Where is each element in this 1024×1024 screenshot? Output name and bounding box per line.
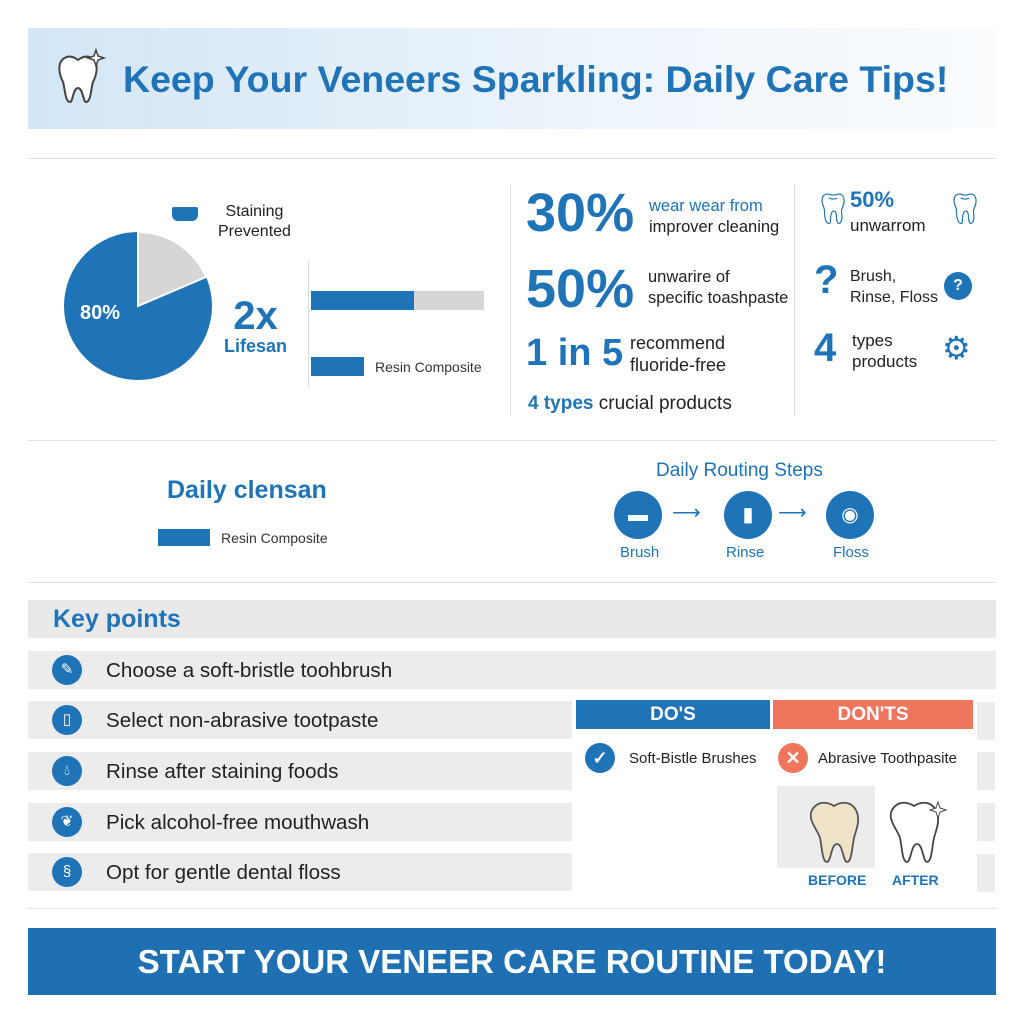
- key point list: ❦: [61, 813, 73, 830]
- staining prevented label: Prevented: [218, 223, 291, 240]
- daily cleansing legend: Daily clensan: [167, 476, 327, 504]
- dos and donts panel: Soft-Bistle Brushes: [629, 750, 757, 767]
- right stats with icons: Brush,: [850, 268, 896, 285]
- key point list: ▯: [63, 711, 71, 728]
- right stats with icons: ?: [814, 258, 838, 302]
- pie chart: [64, 232, 212, 380]
- dos and donts panel: AFTER: [892, 872, 939, 888]
- stat: 2x lifespan: 2x: [233, 294, 278, 338]
- key point list: 💧︎: [64, 762, 70, 779]
- right stats with icons: ⚙: [942, 330, 971, 366]
- dos and donts panel: [576, 700, 974, 892]
- key point list: [28, 651, 996, 891]
- call to action banner: START YOUR VENEER CARE ROUTINE TODAY!: [138, 943, 886, 980]
- stats column: 1 in 5: [526, 332, 623, 374]
- right stats with icons: [814, 187, 984, 371]
- dos and donts panel: ✕: [785, 748, 801, 768]
- daily routine steps: ▬: [628, 504, 648, 526]
- key point list: Opt for gentle dental floss: [106, 861, 341, 884]
- right stats with icons: unwarrom: [850, 216, 926, 235]
- key point list: Choose a soft-bristle toohbrush: [106, 659, 392, 682]
- dos and donts panel: Abrasive Toothpasite: [818, 750, 957, 767]
- right stats with icons: ?: [953, 277, 963, 294]
- stats column: 50%: [526, 259, 634, 319]
- daily cleansing legend: [158, 476, 328, 546]
- stats column: 30%: [526, 183, 634, 243]
- dos and donts panel: DON'TS: [837, 704, 909, 725]
- daily routine steps: [614, 460, 874, 561]
- key point list: Select non-abrasive tootpaste: [106, 709, 378, 732]
- stats column: recommend: [630, 333, 725, 353]
- stats column: improver cleaning: [649, 218, 779, 236]
- daily routine steps: ⟶: [778, 502, 807, 524]
- title: Keep Your Veneers Sparkling: Daily Care Tips!: [123, 58, 948, 100]
- staining prevented label: Staining: [226, 203, 283, 220]
- stats column: 4 types crucial products: [528, 393, 732, 414]
- key point list: ✎: [61, 661, 73, 678]
- call to action banner: [28, 928, 996, 995]
- key points heading: Key points: [53, 605, 181, 633]
- daily routine steps: Daily Routing Steps: [656, 460, 823, 481]
- right stats with icons: 🦷︎: [946, 193, 984, 226]
- right stats with icons: types: [852, 331, 893, 350]
- icon: tooth: [58, 48, 106, 103]
- key point list: Rinse after staining foods: [106, 760, 338, 783]
- stat: 2x lifespan: [224, 294, 287, 356]
- daily routine steps: ◉: [841, 504, 859, 526]
- header banner: [28, 28, 996, 129]
- right stats with icons: 50%: [850, 187, 894, 212]
- key point list: Pick alcohol-free mouthwash: [106, 811, 369, 834]
- bar chart: Resin Composite: [375, 359, 482, 375]
- dos and donts panel: ✓: [592, 748, 608, 768]
- right stats with icons: Rinse, Floss: [850, 289, 938, 306]
- daily routine steps: Floss: [833, 544, 869, 561]
- stat: 2x lifespan: Lifesan: [224, 336, 287, 356]
- stats column: fluoride-free: [630, 355, 726, 375]
- key points heading: [28, 600, 996, 638]
- staining prevented label: [172, 203, 291, 240]
- dos and donts panel: BEFORE: [808, 872, 866, 888]
- daily routine steps: Brush: [620, 544, 659, 561]
- pie chart: 80%: [80, 302, 120, 324]
- bar chart: [308, 260, 488, 388]
- daily cleansing legend: Resin Composite: [221, 530, 328, 546]
- daily routine steps: Rinse: [726, 544, 764, 561]
- key point list: §: [63, 863, 71, 880]
- stats column: specific toashpaste: [648, 289, 788, 307]
- stats column: wear wear from: [649, 197, 763, 215]
- daily routine steps: ⟶: [672, 502, 701, 524]
- right stats with icons: products: [852, 352, 917, 371]
- stats column: unwarire of: [648, 268, 730, 286]
- right stats with icons: 🦷︎: [814, 193, 852, 226]
- right stats with icons: 4: [814, 326, 836, 370]
- dos and donts panel: DO'S: [650, 704, 696, 725]
- stats column: [526, 183, 788, 414]
- daily routine steps: ▮: [742, 504, 754, 526]
